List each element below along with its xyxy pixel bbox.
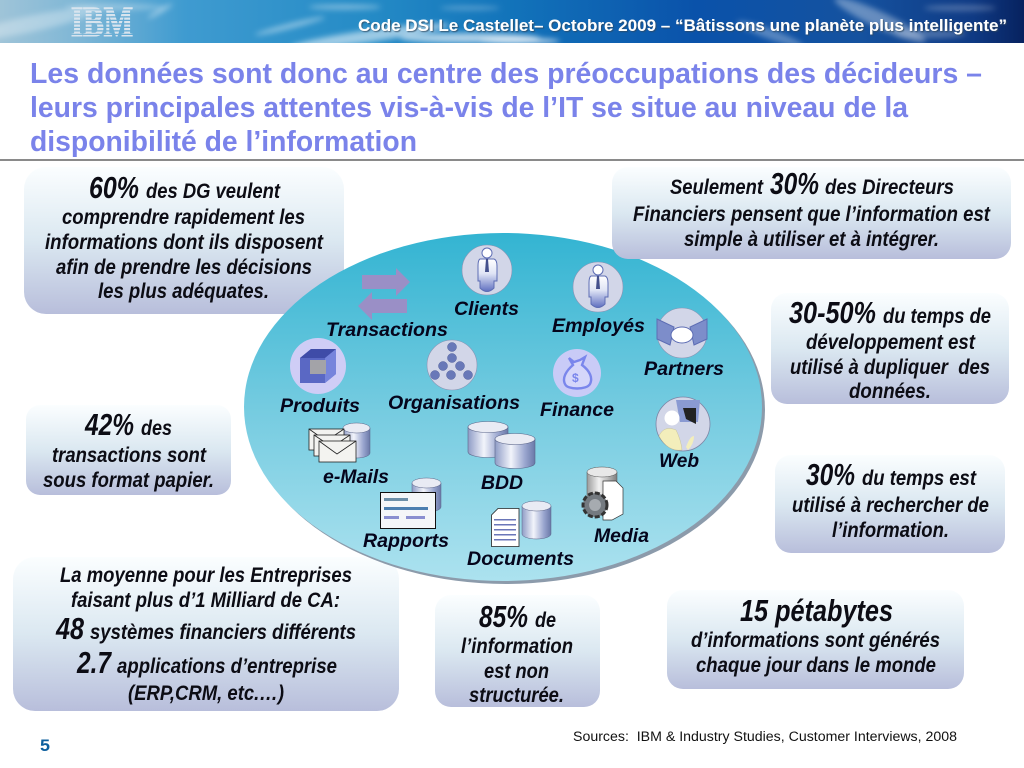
title: Les données sont donc au centre des préoccupations des décideurs – (30, 58, 982, 90)
panel: 30% du temps (775, 455, 1005, 553)
label: Web: Web (659, 451, 699, 472)
icon: employés person (573, 262, 623, 312)
panel: 30-50% du temps: utilisé à dupliquer des (790, 355, 990, 379)
label: Clients: Clients (454, 299, 519, 320)
panel: 60% des DG: 60% (89, 170, 139, 205)
label: Documents: Documents (467, 549, 574, 570)
label: Organisations: Organisations (388, 393, 520, 414)
label: Produits: Produits (280, 396, 360, 417)
label: e-Mails: e-Mails (323, 467, 389, 488)
title (30, 58, 982, 158)
panel: 30-50% du temps (771, 293, 1009, 404)
label: Rapports: Rapports (363, 531, 449, 552)
label: Media: Media (594, 526, 649, 547)
panel: 30-50% du temps: 30-50% (789, 295, 876, 330)
panel: moyenne pour les entreprises: systèmes financiers différents (90, 620, 356, 644)
panel: seulement 30% (612, 166, 1011, 259)
icon: e-mails with database (309, 423, 370, 462)
panel: 15 pétabytes: 15 pétabytes (740, 593, 893, 628)
icon: finance money bag (553, 349, 601, 397)
icon: clients person (462, 245, 512, 295)
central ellipse (244, 233, 765, 584)
panel: 42% des transactions (26, 405, 231, 495)
panel: 85% de l'information: 85% (479, 599, 528, 634)
icon: produits cube (290, 338, 346, 394)
panel: 15 pétabytes: d’informations sont générés (691, 628, 940, 652)
panel: seulement 30%: des Directeurs (825, 175, 954, 199)
panel: 60% des DG: comprendre rapidement les (62, 205, 305, 229)
panel: moyenne pour les entreprises: (ERP,CRM, etc.…) (128, 681, 284, 705)
panel: 85% de l'information: l’information (461, 634, 573, 658)
panel: 42% des transactions: sous format papier. (43, 468, 214, 492)
panel: moyenne pour les entreprises (13, 557, 399, 711)
panel: moyenne pour les entreprises: faisant plus d’1 Milliard de CA: (71, 588, 340, 612)
panel: 30% du temps: utilisé à rechercher de (792, 493, 989, 517)
panel: 85% de l'information: est non (484, 659, 549, 683)
panel: 30% du temps: l’information. (832, 518, 949, 542)
panel: 30-50% du temps: du temps de (883, 304, 991, 328)
label: Employés: Employés (552, 316, 645, 337)
header banner (0, 0, 1024, 43)
label: Finance: Finance (540, 400, 614, 421)
panel: 60% des DG: informations dont ils disposent (45, 230, 324, 254)
icon: partners handshake (657, 308, 707, 358)
panel: seulement 30%: Seulement (670, 175, 764, 199)
panel: seulement 30%: 30% (770, 166, 819, 201)
label: Transactions: Transactions (326, 320, 448, 341)
label: BDD: BDD (481, 473, 523, 494)
panel: 15 pétabytes: chaque jour dans le monde (696, 653, 936, 677)
panel: 42% des transactions: transactions sont (52, 443, 207, 467)
panel: moyenne pour les entreprises: 48 (55, 611, 85, 646)
panel: 30-50% du temps: développement est (806, 330, 976, 354)
icon: media (583, 467, 623, 520)
title: disponibilité de l’information (30, 126, 417, 158)
icon: rapports chart with database (380, 478, 441, 528)
icon: documents with database (492, 501, 551, 546)
panel: 30% du temps: 30% (806, 457, 855, 492)
panel: moyenne pour les entreprises: 2.7 (76, 645, 112, 680)
icon: BDD databases (468, 422, 535, 469)
icon: transactions arrows (358, 268, 410, 320)
panel: 60% des DG (24, 167, 344, 314)
panel: 15 pétabytes (667, 590, 964, 689)
icon: organisations network (427, 340, 477, 390)
panel: 30% du temps: du temps est (862, 466, 977, 490)
panel: moyenne pour les entreprises: La moyenne pour les Entreprises (60, 563, 352, 587)
panel: moyenne pour les entreprises: applications d’entreprise (117, 654, 337, 678)
logo: IBM: IBM (71, 0, 133, 46)
icon: web (656, 397, 710, 451)
icon: finance money bag: $ (572, 371, 579, 385)
panel: seulement 30%: simple à utiliser et à intégrer. (684, 227, 939, 251)
panel: 85% de l'information (435, 595, 600, 707)
panel: 60% des DG: des DG veulent (146, 179, 281, 203)
panel: 42% des transactions: 42% (84, 407, 134, 442)
panel: 85% de l'information: structurée. (469, 683, 564, 707)
page number: 5 (40, 736, 50, 755)
panel: 60% des DG: les plus adéquates. (98, 279, 269, 303)
panel: 30-50% du temps: données. (849, 379, 931, 403)
label: Partners: Partners (644, 359, 724, 380)
header event text: Code DSI Le Castellet– Octobre 2009 – “Bâtissons une planète plus intelligente” (358, 17, 1007, 35)
panel: 60% des DG: afin de prendre les décisions (56, 255, 312, 279)
panel: 85% de l'information: de (535, 608, 556, 632)
sources note: Sources: IBM & Industry Studies, Customer Interviews, 2008 (573, 729, 957, 744)
title: leurs principales attentes vis-à-vis de l’IT se situe au niveau de la (30, 92, 909, 124)
panel: 42% des transactions: des (141, 416, 172, 440)
